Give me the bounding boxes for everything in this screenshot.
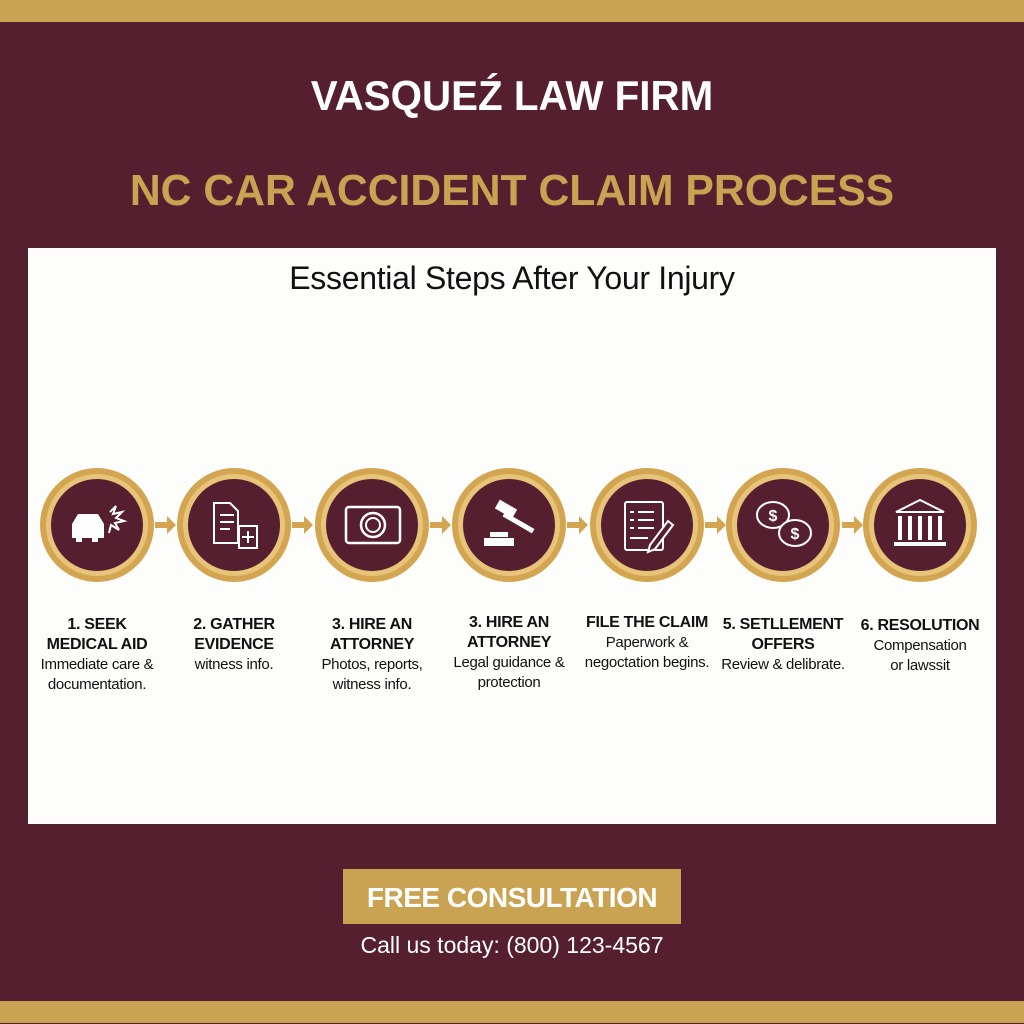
- panel: steps: witness info.: [333, 676, 411, 693]
- icon: camera: [315, 468, 429, 582]
- panel: steps: or lawssit: [890, 657, 950, 674]
- panel: steps: OFFERS: [751, 636, 815, 653]
- panel: steps: 2. GATHER: [193, 616, 275, 633]
- panel: steps: [28, 248, 996, 824]
- icon: dollar bubbles: $: [769, 508, 778, 525]
- panel: steps: ATTORNEY: [330, 636, 414, 653]
- panel: steps: Review & delibrate.: [721, 656, 845, 673]
- step labels: MEDICAL AID: [47, 636, 147, 653]
- panel: steps: witness info.: [195, 656, 273, 673]
- panel: steps: Compensation: [873, 637, 967, 654]
- phone: Call us today: (800) 123-4567: [360, 932, 664, 958]
- panel: steps: Paperwork &: [606, 634, 688, 651]
- icon: documents: [177, 468, 291, 582]
- panel: steps: EVIDENCE: [194, 636, 274, 653]
- step labels: [41, 616, 154, 693]
- subtitle: NC CAR ACCIDENT CLAIM PROCESS: [130, 166, 894, 215]
- panel: steps: 5. SETLLEMENT: [723, 616, 843, 633]
- step labels: 1. SEEK: [67, 616, 127, 633]
- panel: steps: Legal guidance &: [453, 654, 565, 671]
- step labels: documentation.: [48, 676, 146, 693]
- button: free consultation: [343, 869, 681, 924]
- button: free consultation: FREE CONSULTATION: [367, 882, 657, 913]
- icon: car crash: [40, 468, 154, 582]
- panel: steps: 6. RESOLUTION: [861, 617, 979, 634]
- icon: dollar bubbles: $: [791, 526, 800, 543]
- panel: steps: ATTORNEY: [467, 634, 551, 651]
- arrows: [155, 516, 863, 534]
- panel: steps: FILE THE CLAIM: [586, 614, 708, 631]
- icon: courthouse: [863, 468, 977, 582]
- title: VASQUEŹ LAW FIRM: [311, 72, 713, 119]
- panel: steps: negoctation begins.: [585, 654, 709, 671]
- panel: steps: 3. HIRE AN: [469, 614, 549, 631]
- icon: dollar bubbles: [726, 468, 840, 582]
- panel: steps: Photos, reports,: [321, 656, 423, 673]
- icon: gavel: [452, 468, 566, 582]
- step labels: Immediate care &: [41, 656, 153, 673]
- panel: steps: protection: [478, 674, 540, 691]
- panel: steps: 3. HIRE AN: [332, 616, 412, 633]
- panel heading: Essential Steps After Your Injury: [289, 260, 735, 296]
- icon: clipboard: [590, 468, 704, 582]
